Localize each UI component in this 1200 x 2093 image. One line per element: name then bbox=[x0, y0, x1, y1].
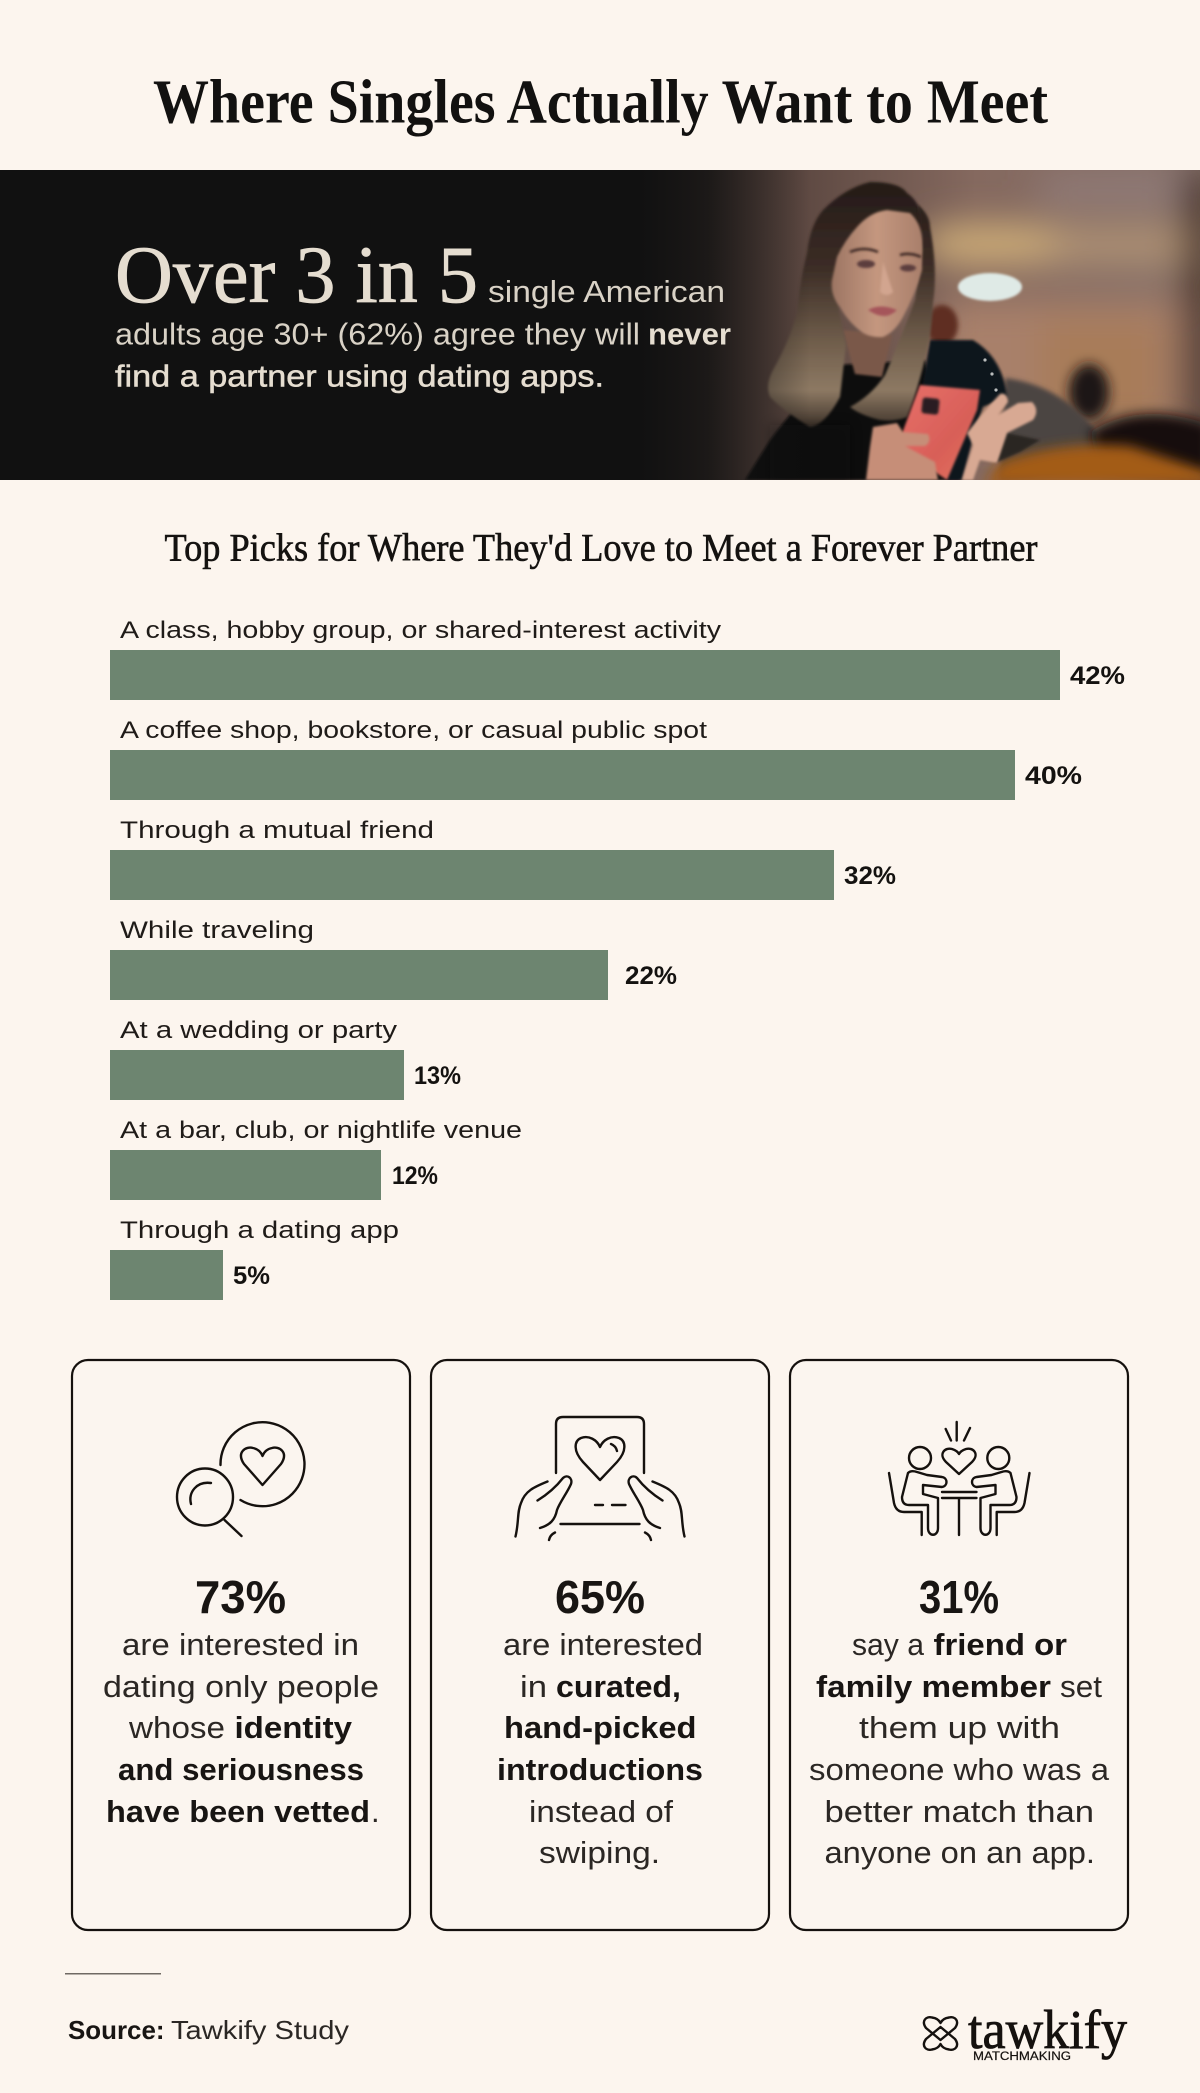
card text: say a bbox=[852, 1627, 925, 1662]
card text bbox=[103, 1627, 380, 1829]
bar: coffee shop 40%: 40% bbox=[1025, 762, 1082, 790]
bar: wedding 13%: 13% bbox=[414, 1062, 461, 1090]
bar: class or hobby 42% bbox=[110, 617, 1125, 700]
card text: hand-picked bbox=[504, 1710, 696, 1745]
bar: wedding 13%: At a wedding or party bbox=[120, 1017, 397, 1044]
source note bbox=[68, 2015, 349, 2045]
sleeve bbox=[923, 340, 1007, 480]
card text: and seriousness bbox=[118, 1752, 364, 1787]
card text: friend or bbox=[934, 1627, 1067, 1662]
icon: tablet in hands bbox=[516, 1417, 684, 1540]
panel: 73% vetted bbox=[72, 1360, 410, 1930]
phone bbox=[897, 385, 980, 480]
source note: Source: bbox=[68, 2015, 164, 2045]
card text: better match than bbox=[824, 1794, 1094, 1829]
panel: 65% curated bbox=[431, 1360, 769, 1930]
bar: mutual friend 32%: 32% bbox=[844, 862, 896, 890]
headline stat: Over 3 in 5 bbox=[115, 229, 478, 320]
card text bbox=[497, 1627, 703, 1870]
body bbox=[745, 360, 960, 480]
bar: dating app 5%: 5% bbox=[233, 1262, 270, 1290]
bar: coffee shop 40%: A coffee shop, bookstore, or casual public spot bbox=[120, 717, 707, 744]
bar: wedding 13% bbox=[110, 1017, 461, 1100]
bar: bar or club 12%: 12% bbox=[392, 1162, 438, 1190]
bar: bar or club 12% bbox=[110, 1117, 522, 1200]
source note: Tawkify Study bbox=[171, 2015, 349, 2045]
facial features bbox=[850, 249, 921, 316]
bar: bar or club 12%: At a bar, club, or nightlife venue bbox=[120, 1117, 522, 1144]
card text: . bbox=[371, 1794, 380, 1829]
icon: couple at table bbox=[889, 1422, 1030, 1535]
card text: family member bbox=[816, 1669, 1051, 1704]
bar: traveling 22%: While traveling bbox=[120, 917, 314, 944]
bar: dating app 5% bbox=[110, 1217, 399, 1300]
card text: in bbox=[520, 1669, 547, 1704]
hero body text: single American bbox=[488, 274, 725, 309]
card text: curated, bbox=[556, 1669, 681, 1704]
lamp bbox=[958, 273, 1022, 301]
bar: mutual friend 32% bbox=[110, 817, 896, 900]
stat: 65%: 65% bbox=[555, 1571, 645, 1623]
card text: them up with bbox=[859, 1710, 1060, 1745]
card text: have been vetted bbox=[106, 1794, 370, 1829]
background head bbox=[1069, 364, 1109, 420]
hero body text bbox=[115, 274, 731, 394]
bar chart bbox=[110, 617, 1125, 1300]
hero body text: find a partner using dating apps. bbox=[115, 358, 604, 394]
gradient fade bbox=[640, 170, 810, 480]
panel: hero banner bbox=[0, 170, 1200, 495]
lower left shadow bbox=[768, 422, 852, 480]
card text: dating only people bbox=[103, 1669, 379, 1704]
card text: introductions bbox=[497, 1752, 703, 1787]
card text: swiping. bbox=[539, 1835, 660, 1870]
foreground dark and bag bbox=[1000, 376, 1098, 470]
hero body text: adults age 30+ (62%) agree they will bbox=[115, 316, 640, 352]
card text bbox=[809, 1627, 1110, 1870]
card text: identity bbox=[234, 1710, 353, 1745]
bar: traveling 22% bbox=[110, 917, 677, 1000]
bar: class or hobby 42%: A class, hobby group, or shared-interest activity bbox=[120, 617, 721, 644]
card text: instead of bbox=[529, 1794, 673, 1829]
card text: whose bbox=[128, 1710, 225, 1745]
logo: tawkify matchmaking: MATCHMAKING bbox=[973, 2051, 1071, 2063]
bar: dating app 5%: Through a dating app bbox=[120, 1217, 399, 1244]
bar: traveling 22%: 22% bbox=[625, 962, 677, 990]
bar chart heading: Top Picks for Where They'd Love to Meet a Forever Partner bbox=[164, 526, 1038, 570]
logo: tawkify matchmaking: tawkify bbox=[968, 1999, 1127, 2060]
card text: are interested bbox=[503, 1627, 703, 1662]
icon: interlocked hearts knot bbox=[924, 2017, 957, 2050]
photo: woman looking at phone bbox=[692, 170, 1200, 480]
title: Where Singles Actually Want to Meet bbox=[153, 68, 1048, 136]
bar: coffee shop 40% bbox=[110, 717, 1082, 800]
card text: someone who was a bbox=[809, 1752, 1110, 1787]
hands bbox=[962, 394, 1036, 480]
stat: 31%: 31% bbox=[919, 1571, 999, 1623]
hair: right strand bbox=[850, 205, 935, 421]
card text: set bbox=[1060, 1669, 1102, 1704]
stat: 73%: 73% bbox=[195, 1571, 286, 1623]
card text: anyone on an app. bbox=[824, 1835, 1095, 1870]
panel: 31% friend or family bbox=[790, 1360, 1128, 1930]
face bbox=[832, 210, 922, 337]
hair: crown and left side bbox=[768, 182, 925, 427]
neck bbox=[843, 330, 892, 377]
bar: class or hobby 42%: 42% bbox=[1070, 662, 1125, 690]
card text: are interested in bbox=[122, 1627, 359, 1662]
hero body text: never bbox=[648, 316, 731, 352]
bar: mutual friend 32%: Through a mutual friend bbox=[120, 817, 434, 844]
icon: magnifier and heart bbox=[177, 1422, 304, 1536]
